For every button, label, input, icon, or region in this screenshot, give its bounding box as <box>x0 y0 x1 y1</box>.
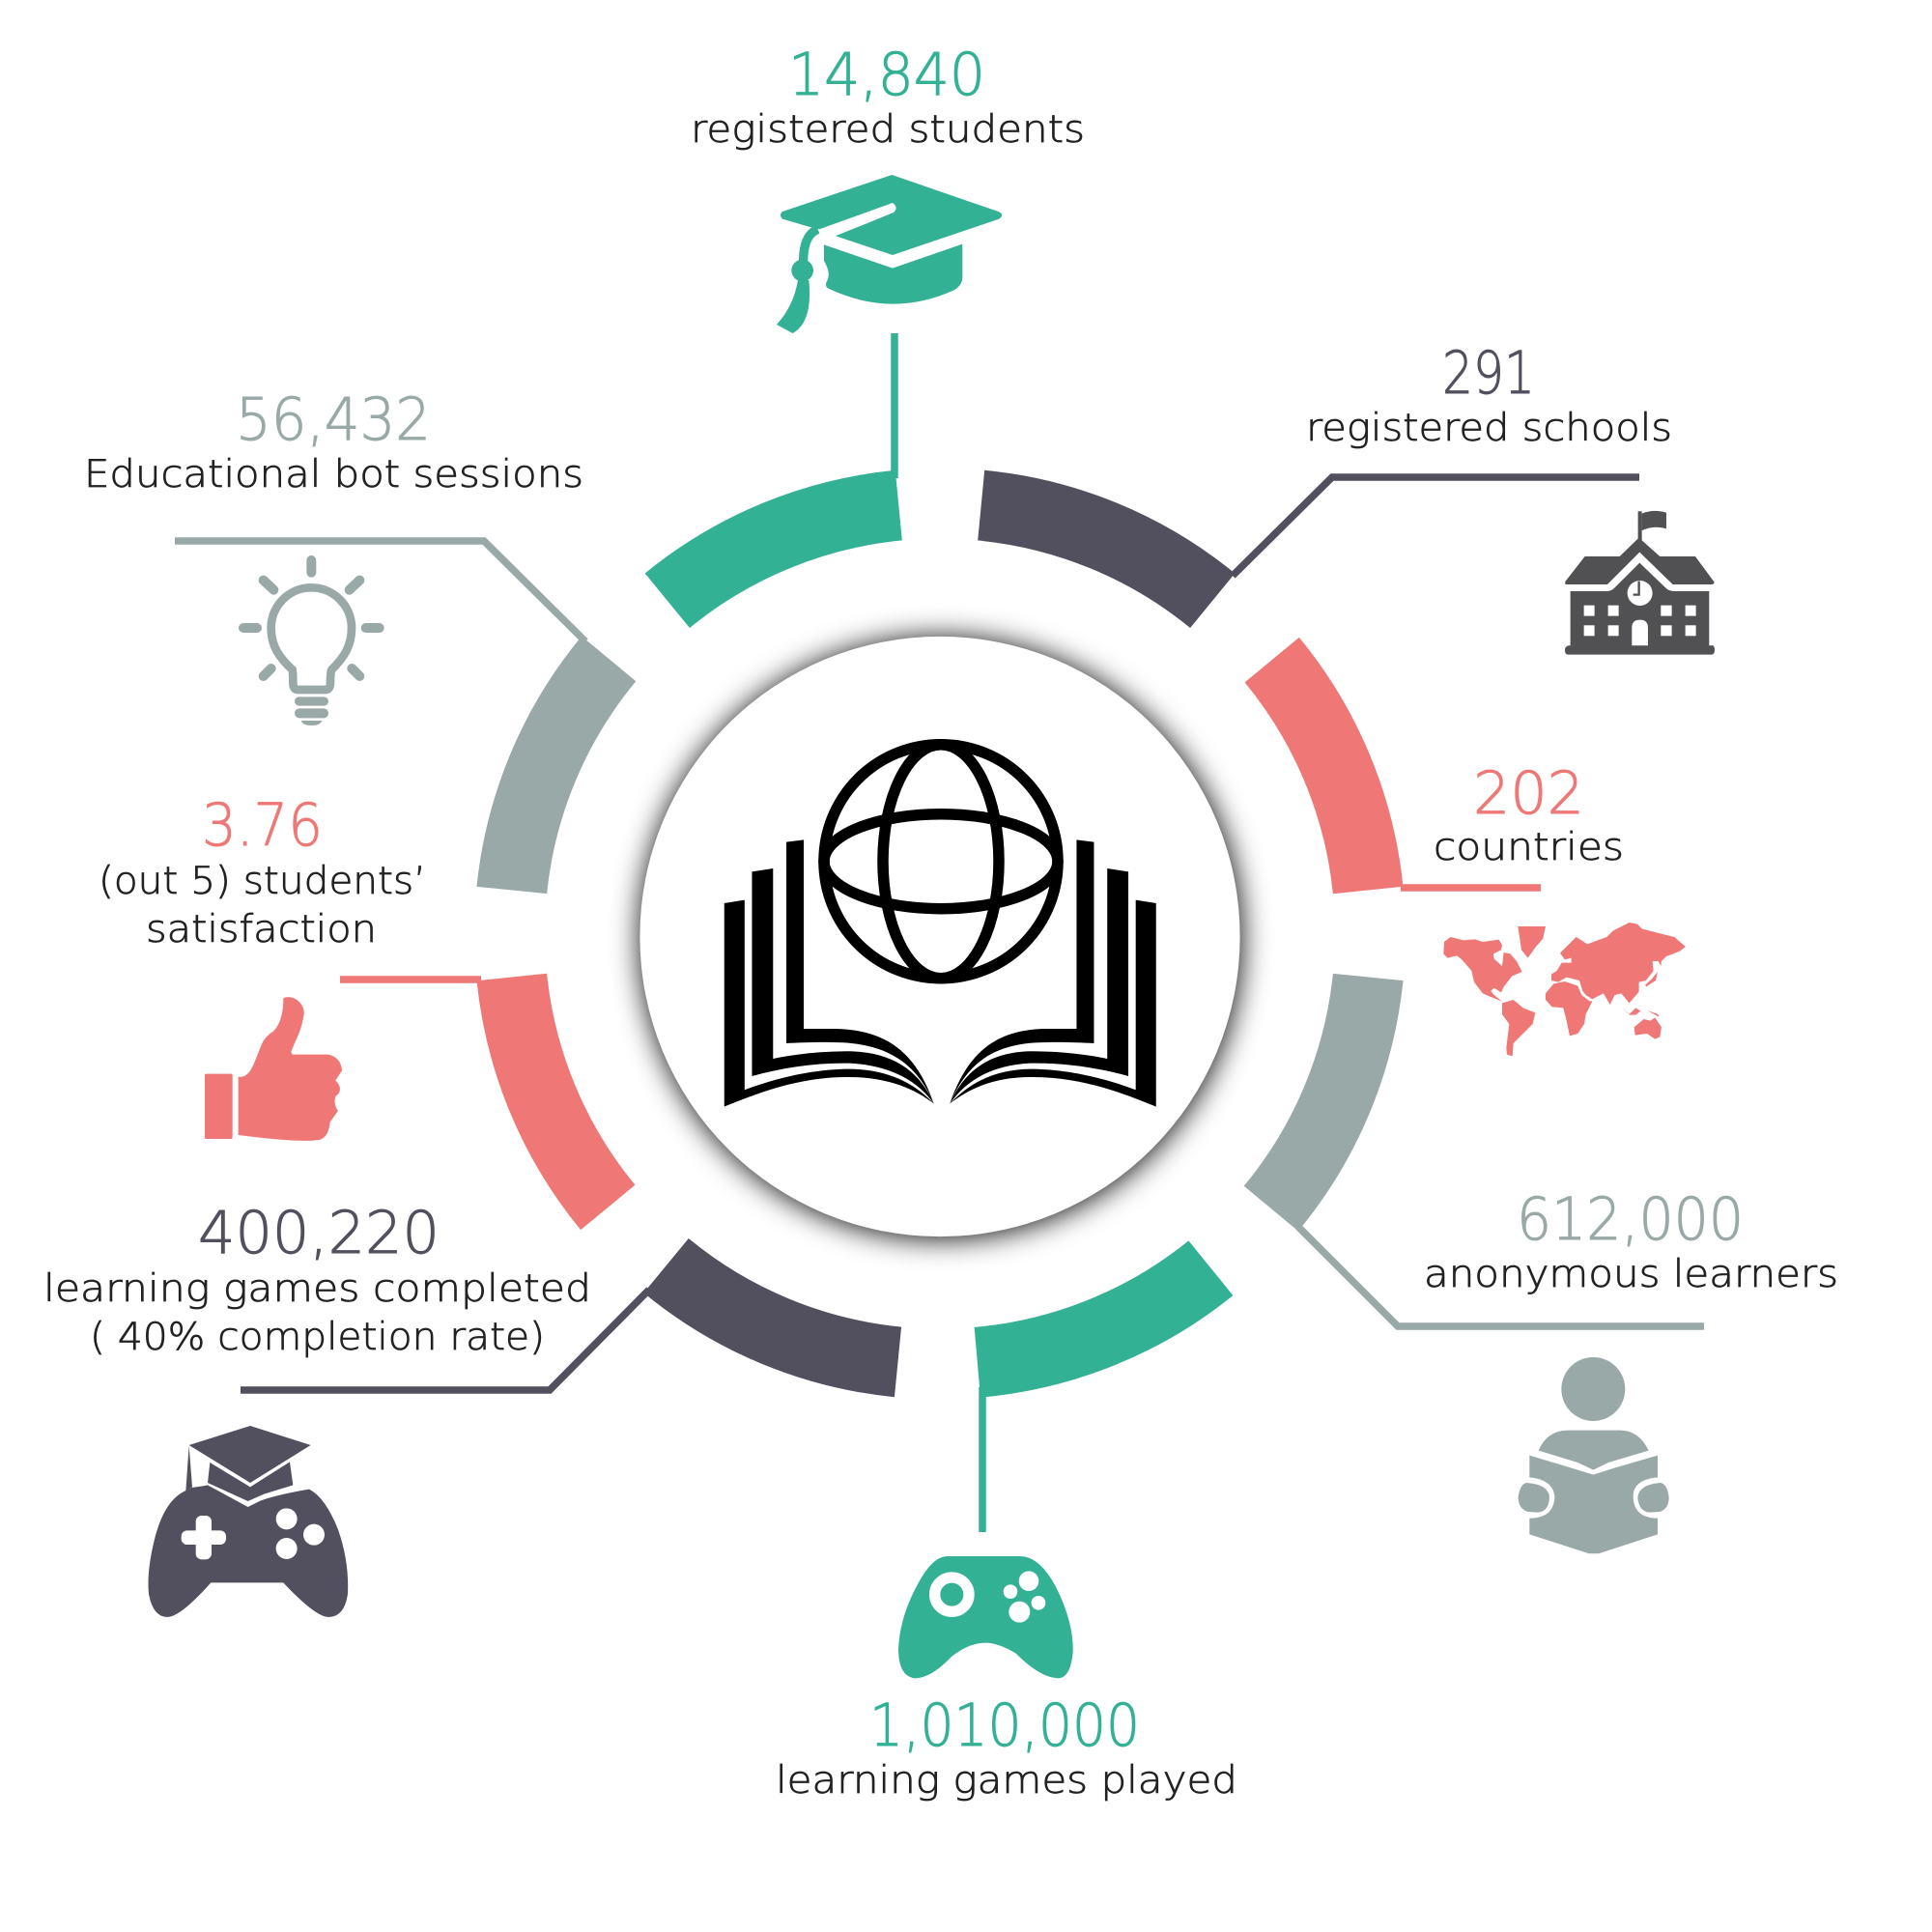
stat: bot sessions: 56,432 <box>236 385 431 454</box>
icon: light bulb <box>243 560 380 725</box>
stat: satisfaction: 3.76 <box>202 791 323 860</box>
open book <box>724 839 1156 1107</box>
arc: red right <box>1272 660 1368 891</box>
icon: world map <box>1443 923 1686 1056</box>
centre circle <box>639 637 1241 1238</box>
connector: satisfaction <box>340 976 481 983</box>
icon: game controller <box>898 1556 1073 1678</box>
icon: school building <box>1565 511 1715 655</box>
stat: registered schools: 291 <box>1442 339 1535 408</box>
stat: learning games played: learning games played <box>776 1759 1237 1803</box>
arc: navy top right <box>981 505 1212 601</box>
icon: graduation cap <box>777 175 1002 333</box>
stat: registered students <box>691 41 1085 152</box>
globe <box>824 745 1058 979</box>
connector: anonymous learners <box>1298 1227 1704 1326</box>
stat: satisfaction: satisfaction <box>146 908 377 952</box>
arc: navy bottom left <box>667 1265 898 1362</box>
stat: bot sessions: Educational bot sessions <box>84 453 583 497</box>
stat: registered schools: registered schools <box>1306 407 1672 450</box>
connector: learning games played <box>979 1387 986 1532</box>
icon: thumbs up <box>205 997 342 1141</box>
stat: learning games completed: learning games completed <box>43 1267 591 1311</box>
stat: registered students: 14,840 <box>788 41 985 109</box>
stat: satisfaction: (out 5) students’ <box>99 860 426 903</box>
icon: person reading <box>1519 1357 1669 1553</box>
stat: anonymous learners <box>1424 1185 1838 1296</box>
connector lines <box>175 333 1704 1532</box>
stat: countries: countries <box>1434 826 1624 869</box>
stat: learning games completed: 400,220 <box>198 1199 440 1267</box>
stat: registered students: registered students <box>691 108 1085 152</box>
connector: countries <box>1401 884 1541 892</box>
stat: learning games played <box>776 1691 1237 1803</box>
stat: registered schools <box>1306 339 1672 450</box>
stat: learning games completed <box>43 1199 591 1359</box>
stat: anonymous learners: 612,000 <box>1517 1185 1744 1254</box>
connector: bot sessions <box>175 541 585 641</box>
stat: countries: 202 <box>1473 759 1584 828</box>
icon: controller with graduation cap <box>148 1426 348 1617</box>
logo: globe over open book <box>724 745 1156 1107</box>
stat: countries <box>1434 759 1624 869</box>
connector: learning games completed <box>241 1290 649 1390</box>
stat: satisfaction <box>99 791 426 952</box>
arcs <box>512 505 1368 1362</box>
connector: registered schools <box>1233 477 1639 576</box>
arc: red left <box>512 978 608 1208</box>
arc: grey left <box>512 659 609 891</box>
stat: bot sessions <box>84 385 583 497</box>
stat: learning games completed: ( 40% completion rate) <box>90 1316 545 1359</box>
stat: learning games played: 1,010,000 <box>869 1691 1140 1760</box>
arc: teal top <box>668 505 898 601</box>
connector: registered students <box>891 333 898 478</box>
arc: teal bottom <box>978 1268 1210 1362</box>
stat: anonymous learners: anonymous learners <box>1424 1253 1838 1296</box>
arc: grey right <box>1271 978 1368 1208</box>
